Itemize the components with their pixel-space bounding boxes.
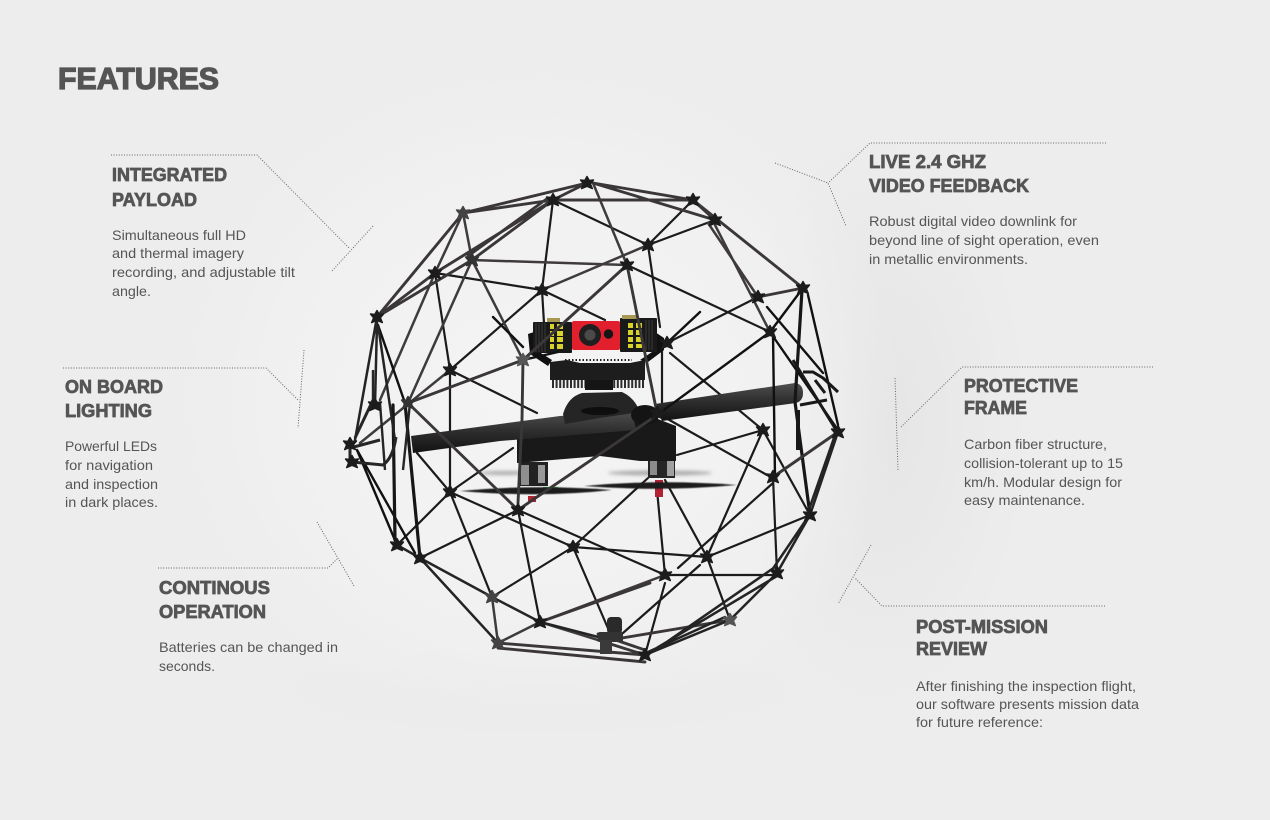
heading: live video feedback: VIDEO FEEDBACK bbox=[869, 176, 1029, 196]
heading: post-mission review: REVIEW bbox=[916, 639, 987, 659]
heading: post-mission review: POST-MISSION bbox=[916, 617, 1048, 637]
text: integrated payload: and thermal imagery bbox=[112, 245, 244, 261]
text: integrated payload bbox=[112, 227, 295, 299]
cage: front struts bbox=[355, 183, 838, 662]
text: integrated payload: angle. bbox=[112, 283, 151, 299]
text: protective frame: collision-tolerant up to 15 bbox=[964, 455, 1123, 471]
heading: live video feedback bbox=[869, 152, 1029, 196]
lower hull bbox=[517, 416, 676, 463]
cage: left end cluster bbox=[350, 370, 410, 470]
red camera bbox=[572, 321, 620, 350]
text: continous operation: seconds. bbox=[159, 658, 215, 674]
text: post-mission review: for future reference: bbox=[916, 714, 1043, 730]
heading: post-mission review bbox=[916, 617, 1048, 659]
cage: rear struts bbox=[360, 183, 810, 655]
text: live video feedback: beyond line of sight operation, even bbox=[869, 232, 1099, 248]
text: integrated payload: Simultaneous full HD bbox=[112, 227, 246, 243]
propellers bbox=[460, 482, 737, 494]
text: on board lighting: and inspection bbox=[65, 476, 158, 492]
panel: on board lighting bbox=[63, 350, 304, 510]
text: protective frame bbox=[964, 436, 1123, 508]
panel: continous operation bbox=[158, 522, 354, 674]
panel: post-mission review bbox=[838, 545, 1139, 730]
motors bbox=[520, 450, 675, 502]
LED panel right bbox=[620, 315, 657, 352]
drone in spherical cage bbox=[344, 176, 844, 662]
heading: protective frame: PROTECTIVE bbox=[964, 376, 1078, 396]
heading: continous operation bbox=[159, 578, 270, 622]
upper propeller blur bbox=[479, 470, 712, 476]
cage: connector nodes bbox=[344, 176, 844, 661]
arm bbox=[411, 411, 636, 453]
leader lines: live video feedback bbox=[775, 143, 1106, 226]
text: live video feedback: Robust digital video downlink for bbox=[869, 213, 1077, 229]
thermal heat sink bbox=[550, 360, 645, 390]
heading: on board lighting: ON BOARD bbox=[65, 377, 163, 397]
text: on board lighting: for navigation bbox=[65, 457, 153, 473]
heading: on board lighting bbox=[65, 377, 163, 421]
leader lines: on board lighting bbox=[63, 350, 304, 428]
text: protective frame: Carbon fiber structure, bbox=[964, 436, 1107, 452]
text: on board lighting bbox=[65, 438, 158, 510]
leader lines: integrated payload bbox=[111, 155, 373, 271]
leader lines: continous operation bbox=[158, 522, 354, 586]
drone body bbox=[411, 383, 803, 502]
heading: on board lighting: LIGHTING bbox=[65, 401, 152, 421]
text: post-mission review: After finishing the inspection flight, bbox=[916, 678, 1136, 694]
text: live video feedback bbox=[869, 213, 1099, 267]
panel: live video feedback bbox=[775, 143, 1106, 267]
heading: integrated payload: PAYLOAD bbox=[112, 190, 197, 210]
text: integrated payload: recording, and adjustable tilt bbox=[112, 264, 295, 280]
hub dome bbox=[563, 392, 640, 424]
text: post-mission review bbox=[916, 678, 1139, 730]
heading: live video feedback: LIVE 2.4 GHZ bbox=[869, 152, 986, 172]
text: protective frame: easy maintenance. bbox=[964, 492, 1085, 508]
heading: integrated payload: INTEGRATED bbox=[112, 165, 227, 185]
text: live video feedback: in metallic environments. bbox=[869, 251, 1028, 267]
drone camera payload bbox=[528, 315, 664, 390]
LED panel left bbox=[533, 318, 572, 353]
heading: continous operation: OPERATION bbox=[159, 602, 266, 622]
heading: protective frame bbox=[964, 376, 1078, 418]
heading: protective frame: FRAME bbox=[964, 398, 1027, 418]
text: continous operation: Batteries can be changed in bbox=[159, 639, 338, 655]
text: continous operation bbox=[159, 639, 338, 674]
gimbal brackets bbox=[528, 332, 664, 366]
text: protective frame: km/h. Modular design for bbox=[964, 474, 1122, 490]
leader lines: post-mission review bbox=[838, 545, 1105, 606]
cage: right end cluster bbox=[793, 360, 838, 450]
text: post-mission review: our software presents mission data bbox=[916, 696, 1139, 712]
heading: continous operation: CONTINOUS bbox=[159, 578, 270, 598]
icon: bottom sensor bbox=[598, 617, 623, 654]
text: on board lighting: in dark places. bbox=[65, 494, 158, 510]
panel: integrated payload bbox=[111, 155, 373, 299]
panel: protective frame bbox=[895, 367, 1153, 508]
text: on board lighting: Powerful LEDs bbox=[65, 438, 157, 454]
title: FEATURES bbox=[58, 61, 219, 96]
leader lines: protective frame bbox=[895, 367, 1153, 470]
heading: integrated payload bbox=[112, 165, 227, 210]
